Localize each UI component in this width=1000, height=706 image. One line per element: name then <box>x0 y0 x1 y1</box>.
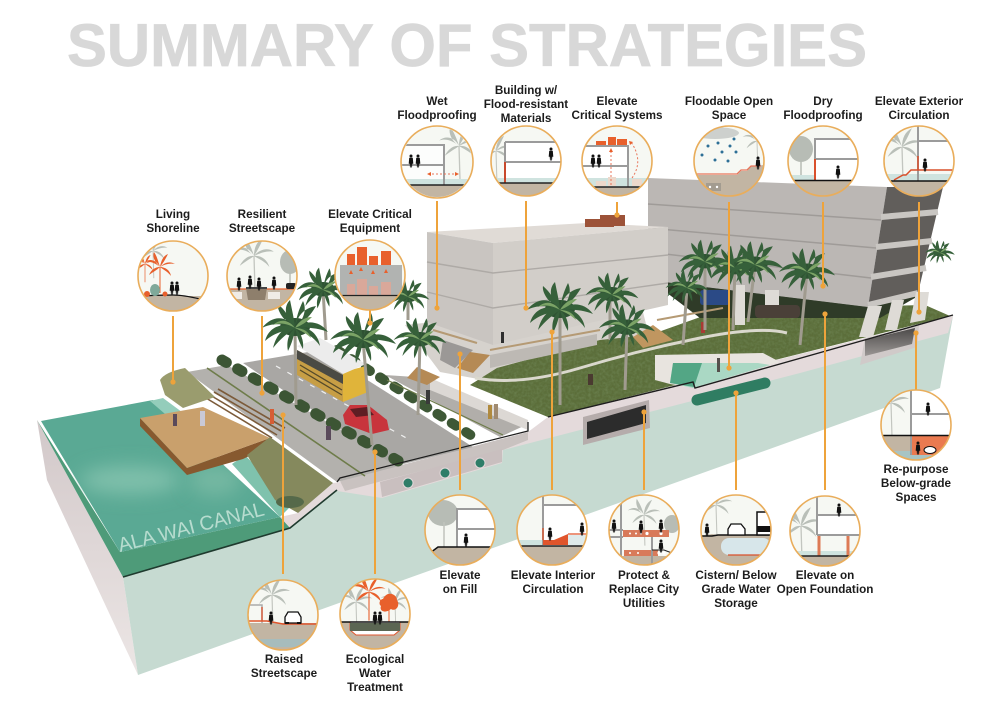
pool <box>655 353 780 388</box>
label: ecological water treatment: Ecological <box>346 653 404 666</box>
label: protect and replace city utilities: Replace City <box>609 583 680 596</box>
label: wet floodproofing: Wet <box>426 95 448 108</box>
label: living shoreline: Living <box>156 208 190 221</box>
garage side <box>868 187 943 307</box>
icon: cistern below grade water storage <box>700 489 771 566</box>
label: floodable open space: Floodable Open <box>685 95 773 108</box>
label: resilient streetscape: Streetscape <box>229 222 296 235</box>
left face of site block <box>37 420 138 675</box>
icon: building with flood-resistant materials <box>490 125 562 197</box>
canal edge <box>123 490 337 577</box>
icon: resilient streetscape <box>227 236 300 312</box>
label: elevate interior circulation: Elevate Interior <box>511 569 596 582</box>
labels <box>146 84 964 694</box>
label: repurpose below-grade spaces: Re-purpose <box>884 463 949 476</box>
ramp shadow <box>440 340 473 368</box>
label: ecological water treatment: Treatment <box>347 681 403 694</box>
icon: elevate critical equipment <box>335 240 405 311</box>
label: building with flood-resistant materials: Materials <box>501 112 552 125</box>
roof <box>427 223 668 243</box>
label: wet floodproofing: Floodproofing <box>397 109 477 122</box>
palm trees <box>262 240 955 445</box>
bicycle path <box>385 375 528 437</box>
label: protect and replace city utilities: Utilities <box>623 597 666 610</box>
parked cars <box>700 290 800 318</box>
promenade <box>187 365 403 482</box>
shoreline grass <box>160 368 333 513</box>
shaded ground under garage <box>650 280 920 318</box>
label: elevate critical equipment: Elevate Critical <box>328 208 412 221</box>
low wall <box>430 378 528 430</box>
icon: elevate critical systems <box>582 126 652 197</box>
icon: ecological water treatment <box>340 576 410 650</box>
long face <box>493 227 668 345</box>
fences and stairs <box>407 308 723 385</box>
icon: dry floodproofing <box>788 126 858 197</box>
left face <box>427 232 493 345</box>
label: repurpose below-grade spaces: Below-grade <box>881 477 952 490</box>
road wall <box>340 432 528 491</box>
deck <box>140 407 270 475</box>
lane markings <box>276 366 410 440</box>
canal water surface <box>41 400 280 552</box>
icon: elevate interior circulation <box>517 495 587 566</box>
label: cistern below grade water storage: Cistern/ Below <box>695 569 777 582</box>
red car <box>343 405 389 434</box>
label: elevate critical systems: Elevate <box>597 95 638 108</box>
label: living shoreline: Shoreline <box>146 222 200 235</box>
icon: protect and replace city utilities <box>609 495 680 566</box>
garage columns <box>735 285 929 337</box>
icon: floodable open space <box>691 126 771 197</box>
label: raised streetscape: Streetscape <box>251 667 318 680</box>
label: dry floodproofing: Floodproofing <box>783 109 863 122</box>
title: SUMMARY OF STRATEGIES <box>67 12 867 79</box>
culvert panel <box>380 449 502 497</box>
roof equipment <box>585 215 625 227</box>
icon: wet floodproofing <box>401 126 479 198</box>
icon: living shoreline <box>134 237 208 312</box>
canal name: ALA WAI CANAL <box>116 498 267 557</box>
utility tunnel <box>583 400 650 445</box>
icon: elevate exterior circulation <box>882 126 954 197</box>
culvert openings <box>403 458 485 488</box>
label: floodable open space: Space <box>712 109 747 122</box>
shallow shoreline <box>150 398 190 420</box>
walkway <box>475 330 787 380</box>
icon: raised streetscape <box>248 577 318 651</box>
label: raised streetscape: Raised <box>265 653 303 666</box>
lawn <box>470 305 950 417</box>
label: elevate exterior circulation: Circulation <box>888 109 950 122</box>
canal water front band <box>37 420 290 577</box>
label: building with flood-resistant materials: Flood-resistant <box>484 98 568 111</box>
label: resilient streetscape: Resilient <box>238 208 286 221</box>
cistern <box>697 383 765 400</box>
label: elevate on open foundation: Open Foundation <box>777 583 873 596</box>
promenade strip <box>207 368 365 476</box>
icon: elevate on fill <box>425 495 495 566</box>
label: elevate on fill: Elevate <box>440 569 481 582</box>
garage building <box>648 178 943 337</box>
site model <box>37 178 955 675</box>
garage facade <box>648 178 887 307</box>
front railing <box>337 422 528 482</box>
label: dry floodproofing: Dry <box>813 95 833 108</box>
school bus <box>297 338 368 402</box>
road <box>243 350 473 466</box>
label: ecological water treatment: Water <box>359 667 391 680</box>
plaza base <box>405 300 650 383</box>
stepped seating <box>206 389 285 438</box>
label: elevate interior circulation: Circulation <box>522 583 584 596</box>
label: elevate critical equipment: Equipment <box>340 222 400 235</box>
planting strip two <box>337 350 480 441</box>
figures <box>173 322 720 440</box>
front face of site block <box>123 316 953 675</box>
leader lines <box>170 201 922 574</box>
label: protect and replace city utilities: Protect & <box>618 569 671 582</box>
planting strip <box>222 360 400 462</box>
label: elevate critical systems: Critical Systems <box>572 109 663 122</box>
label: elevate on fill: on Fill <box>443 583 477 596</box>
label: building with flood-resistant materials: Building w/ <box>495 84 558 97</box>
label: elevate on open foundation: Elevate on <box>796 569 854 582</box>
main building <box>427 215 668 345</box>
concrete band <box>280 316 953 528</box>
label: cistern below grade water storage: Storage <box>714 597 758 610</box>
water highlights <box>80 464 241 496</box>
icon: elevate on open foundation <box>781 496 860 567</box>
icon: repurpose below-grade spaces <box>880 389 952 461</box>
below-grade space <box>860 325 919 365</box>
label: elevate exterior circulation: Elevate Exterior <box>875 95 964 108</box>
label: cistern below grade water storage: Grade Water <box>701 583 771 596</box>
label: repurpose below-grade spaces: Spaces <box>896 491 937 504</box>
seawall railing <box>548 315 953 417</box>
